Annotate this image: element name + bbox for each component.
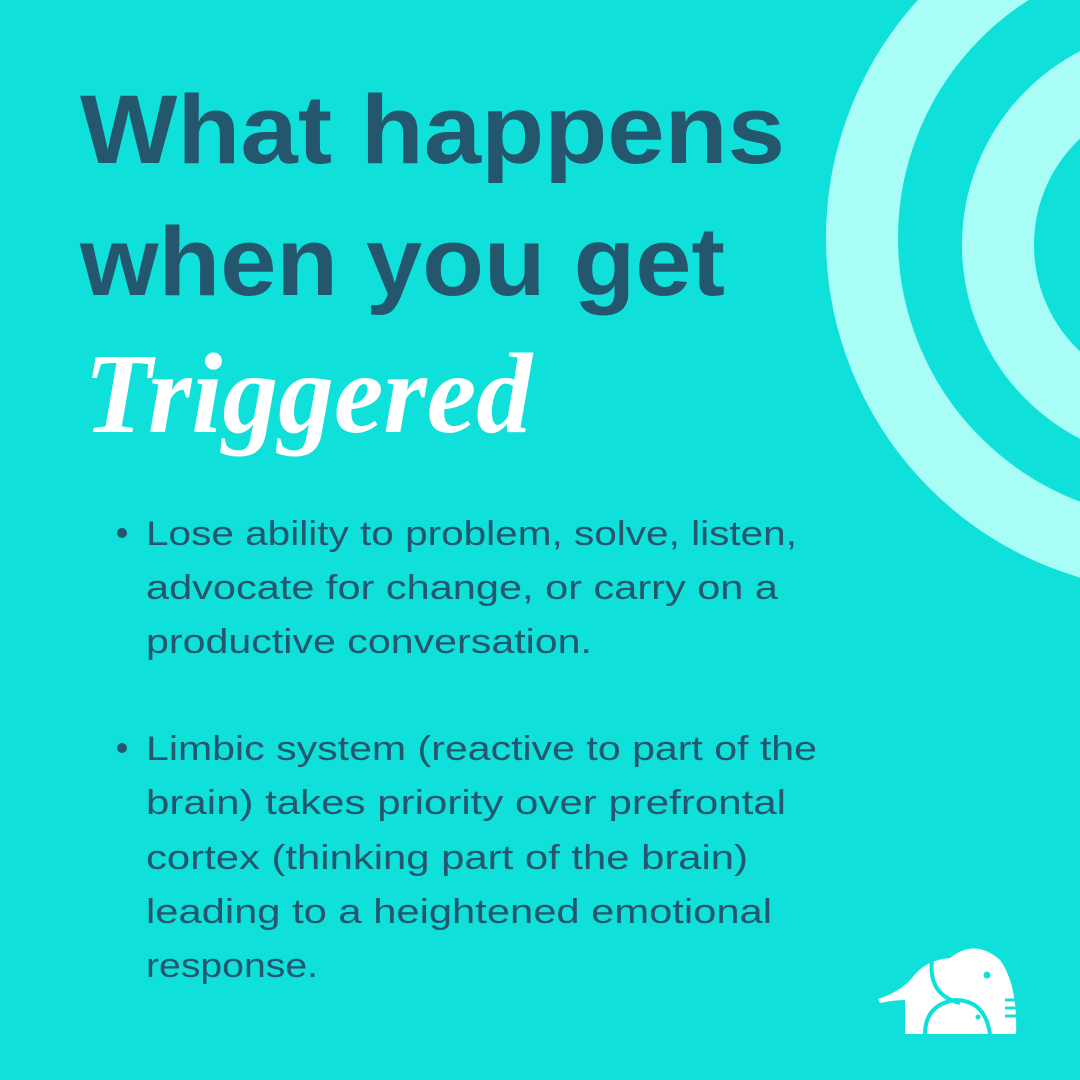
bullet 2: response. bbox=[146, 947, 318, 985]
bullet 2: leading to a heightened emotional bbox=[146, 893, 772, 931]
bullet 1: productive conversation. bbox=[146, 623, 592, 661]
bullet 1: Lose ability to problem, solve, listen, bbox=[146, 515, 797, 553]
bullet 2: brain) takes priority over prefrontal bbox=[146, 784, 786, 822]
bullet 2: Limbic system (reactive to part of the bbox=[146, 730, 817, 768]
bullet 2: cortex (thinking part of the brain) bbox=[146, 839, 748, 877]
title: when you get bbox=[79, 207, 725, 316]
bullet 1: advocate for change, or carry on a bbox=[146, 569, 778, 607]
decorative concentric rings bbox=[862, 0, 1080, 556]
title bbox=[79, 75, 785, 316]
bullet 2 bbox=[117, 730, 817, 985]
bullet 1 bbox=[117, 515, 797, 661]
title: What happens bbox=[80, 75, 785, 184]
icon: elephant logo bbox=[878, 948, 1018, 1034]
title accent: Triggered: Triggered bbox=[84, 330, 534, 457]
